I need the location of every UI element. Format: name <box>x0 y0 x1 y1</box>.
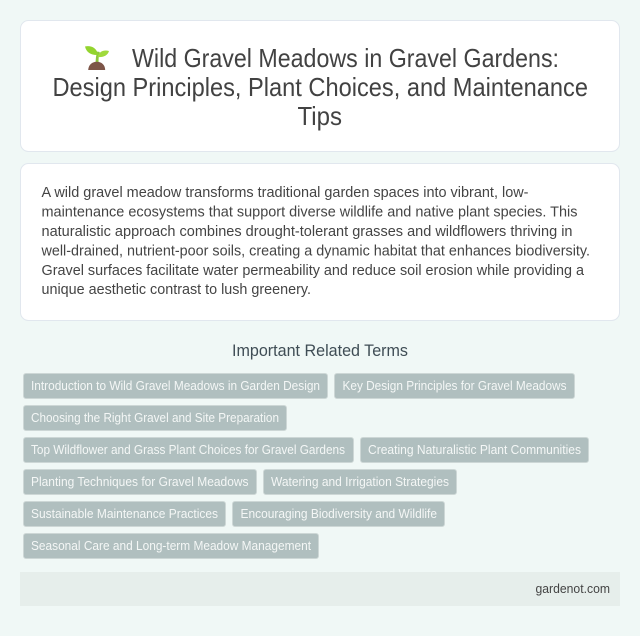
tag: introduction: Introduction to Wild Gravel Meadows in Garden Design <box>31 378 320 393</box>
title: Wild Gravel Meadows in Gravel Gardens: <box>132 45 559 73</box>
text block: description: maintenance ecosystems that support diverse wildlife and native plant species. This <box>42 204 578 220</box>
panel: title card <box>20 20 620 152</box>
text block: description: A wild gravel meadow transforms traditional garden spaces into vibrant, low- <box>42 185 529 201</box>
text block: description: well-drained, nutrient-poor soils, creating a dynamic habitat that enhances biodiversity. <box>41 244 590 260</box>
tag: choosing gravel <box>24 406 286 430</box>
title: Tips <box>298 103 342 131</box>
tag list <box>24 374 588 558</box>
heading: important related terms: Important Related Terms <box>232 342 408 360</box>
footer <box>20 572 620 606</box>
tag: seasonal care: Seasonal Care and Long-term Meadow Management <box>31 538 311 553</box>
tag: key design principles: Key Design Principles for Gravel Meadows <box>342 378 566 393</box>
title: Design Principles, Plant Choices, and Maintenance <box>52 74 588 102</box>
tag: planting techniques <box>24 470 256 494</box>
tag: key design principles <box>334 374 574 398</box>
tag: introduction <box>24 374 328 398</box>
panel: description card <box>20 164 620 320</box>
tag: sustainable maintenance: Sustainable Maintenance Practices <box>31 506 218 521</box>
tag: choosing gravel: Choosing the Right Gravel and Site Preparation <box>31 410 279 425</box>
tag: top plant choices: Top Wildflower and Grass Plant Choices for Gravel Gardens <box>31 442 345 457</box>
text block: description: unique aesthetic contrast to lush greenery. <box>42 282 311 298</box>
tag: biodiversity: Encouraging Biodiversity and Wildlife <box>240 506 437 521</box>
tag: planting techniques: Planting Techniques for Gravel Meadows <box>31 474 248 489</box>
tag: top plant choices <box>24 438 354 462</box>
footer: gardenot.com <box>536 581 610 596</box>
tag: seasonal care <box>24 534 318 558</box>
text block: description: naturalistic approach combines drought-tolerant grasses and wildflowers thriving in <box>42 224 572 240</box>
tag: watering: Watering and Irrigation Strategies <box>271 474 449 489</box>
text block: description <box>41 185 590 298</box>
tag: biodiversity <box>232 502 444 526</box>
title <box>52 45 588 131</box>
tag: sustainable maintenance <box>24 502 226 526</box>
tag: plant communities <box>360 438 588 462</box>
icon: seedling <box>85 46 109 70</box>
tag: watering <box>264 470 456 494</box>
text block: description: Gravel surfaces facilitate water permeability and reduce soil erosion while providing a <box>42 263 585 279</box>
tag: plant communities: Creating Naturalistic Plant Communities <box>368 442 581 457</box>
